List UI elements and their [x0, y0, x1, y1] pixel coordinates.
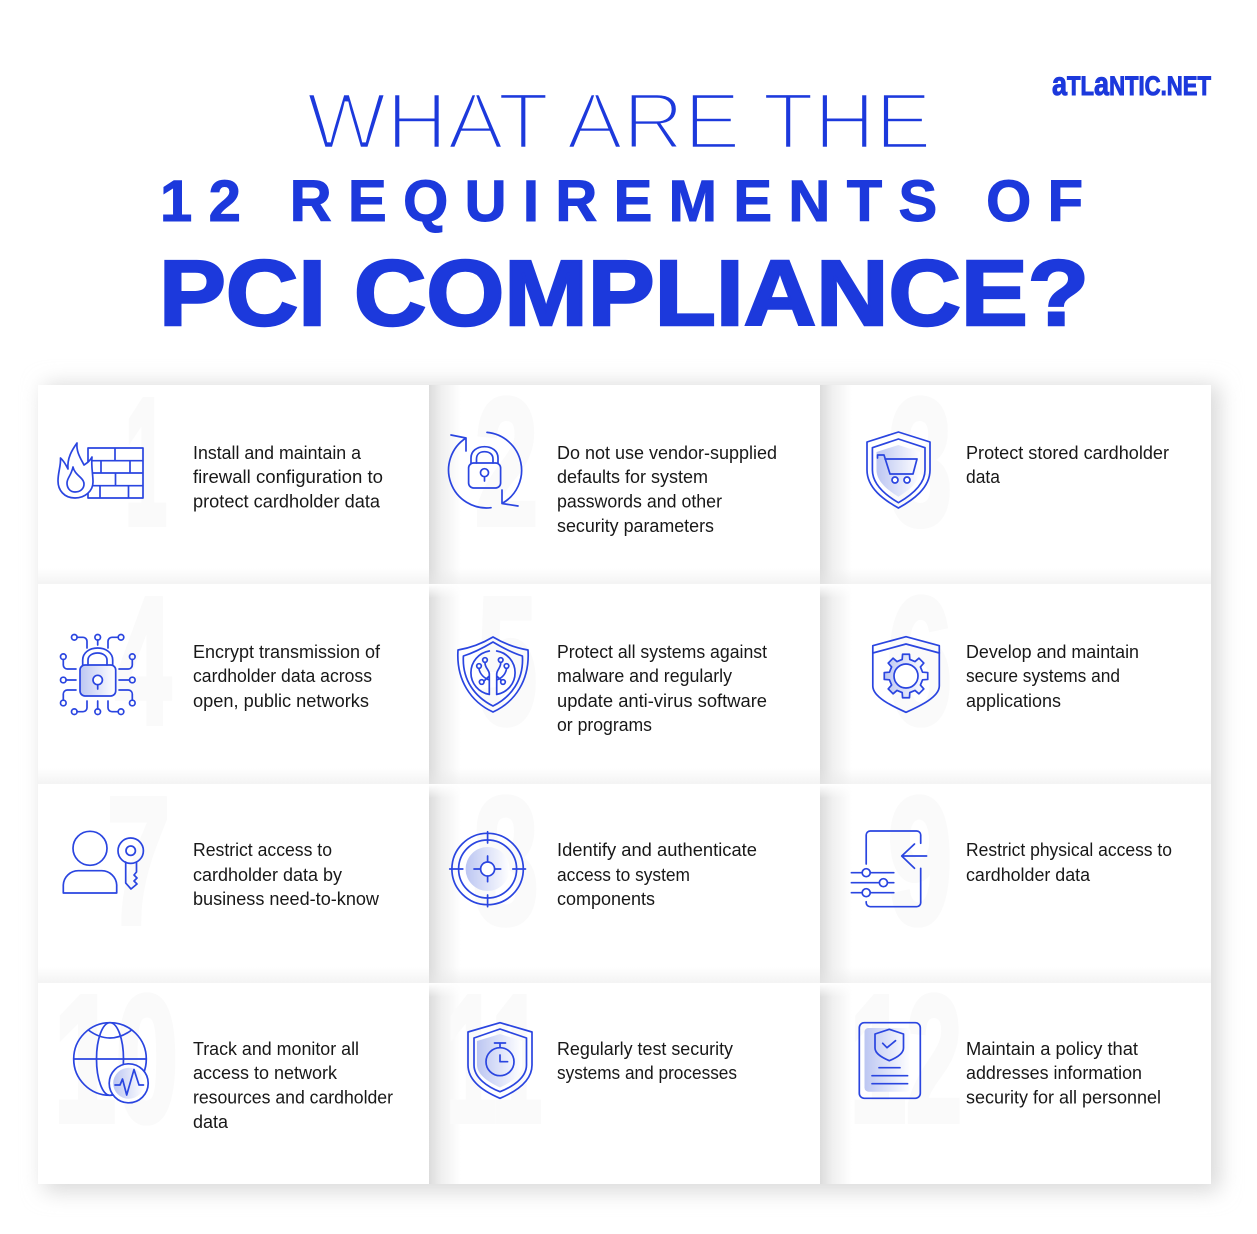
card 10 [54, 959, 393, 1160]
text [966, 839, 1172, 885]
text: business need-to-know [193, 888, 380, 909]
text: firewall configuration to [193, 466, 383, 487]
text [557, 442, 777, 536]
text [193, 442, 383, 512]
text: systems and processes [557, 1062, 737, 1083]
icon: gear shield [873, 637, 939, 712]
icon: target [450, 832, 526, 907]
text [966, 641, 1139, 711]
card 1: 1 [125, 362, 167, 563]
card 8 [450, 761, 757, 962]
text: components [557, 888, 655, 909]
text: access to network [193, 1062, 338, 1083]
text: applications [966, 690, 1061, 711]
text [193, 1038, 393, 1132]
icon: rotating lock [449, 432, 522, 508]
text: Encrypt transmission of [193, 641, 381, 662]
card 5 [458, 561, 768, 762]
icon: globe with pulse [74, 1023, 148, 1103]
title line: 12 requirements of: 12 REQUIREMENTS OF [160, 169, 1083, 234]
card 6 [873, 561, 1139, 762]
icon: shield with cart [867, 432, 930, 508]
number 12: 12 [850, 959, 962, 1160]
card 11 [446, 959, 737, 1160]
text: Maintain a policy that [966, 1038, 1139, 1059]
card 2 [449, 362, 777, 563]
text: Protect stored cardholder [966, 442, 1169, 463]
text: Install and maintain a [193, 442, 362, 463]
number 10: 10 [54, 959, 178, 1160]
text: secure systems and [966, 665, 1120, 686]
text: passwords and other [557, 490, 722, 512]
number 5: 5 [477, 561, 537, 762]
number 6: 6 [887, 561, 952, 762]
card 4 [60, 561, 381, 762]
card 1 [58, 362, 383, 563]
icon: circuit lock [60, 634, 135, 714]
text: malware and regularly [557, 665, 733, 686]
card 12 [850, 959, 1161, 1160]
text: Restrict physical access to [966, 839, 1172, 860]
text [966, 442, 1169, 487]
text: defaults for system [557, 466, 708, 487]
text: Regularly test security [557, 1038, 734, 1059]
icon: policy document [859, 1023, 920, 1098]
text: or programs [557, 714, 652, 735]
text: open, public networks [193, 690, 369, 711]
icon: user and key [63, 831, 143, 893]
text: resources and cardholder [193, 1086, 393, 1108]
text: data [966, 466, 1001, 487]
grid shadow [44, 385, 1219, 1191]
text: Protect all systems against [557, 641, 768, 662]
icon: stopwatch shield [468, 1023, 532, 1098]
text: access to system [557, 864, 690, 885]
title line: what are the: WHAT ARE THE [306, 77, 932, 166]
number 7: 7 [107, 761, 170, 962]
text [193, 839, 380, 909]
number 8: 8 [473, 761, 538, 962]
text: cardholder data across [193, 665, 372, 686]
number 3: 3 [889, 362, 952, 563]
text: data [193, 1111, 229, 1132]
card 7 [63, 761, 380, 962]
text [193, 641, 381, 711]
text: Track and monitor all [193, 1038, 359, 1059]
text: update anti-virus software [557, 690, 767, 711]
title line: pci compliance: PCI COMPLIANCE? [159, 241, 1089, 345]
text: addresses information [966, 1062, 1142, 1083]
number 2: 2 [475, 362, 538, 563]
text: cardholder data by [193, 864, 343, 885]
text [557, 1038, 737, 1083]
text [966, 1038, 1161, 1108]
icon: malware shield [458, 637, 528, 712]
text: Do not use vendor-supplied [557, 442, 777, 463]
logo: atlantic.net: aTLaNTIC.NET [1052, 65, 1211, 102]
text [557, 839, 757, 909]
number 9: 9 [888, 761, 952, 962]
title [159, 77, 1089, 345]
text: cardholder data [966, 864, 1091, 885]
card 3 [867, 362, 1169, 563]
text: Identify and authenticate [557, 839, 757, 860]
text: Develop and maintain [966, 641, 1139, 662]
text: security for all personnel [966, 1086, 1161, 1108]
icon: door access [851, 831, 927, 907]
number 4: 4 [115, 561, 171, 762]
icon: firewall [58, 443, 143, 498]
text [557, 641, 768, 735]
card 9 [851, 761, 1172, 962]
number 11: 11 [446, 959, 542, 1160]
text: Restrict access to [193, 839, 332, 860]
text: protect cardholder data [193, 490, 381, 512]
card grid [38, 385, 1211, 1184]
text: security parameters [557, 515, 714, 536]
